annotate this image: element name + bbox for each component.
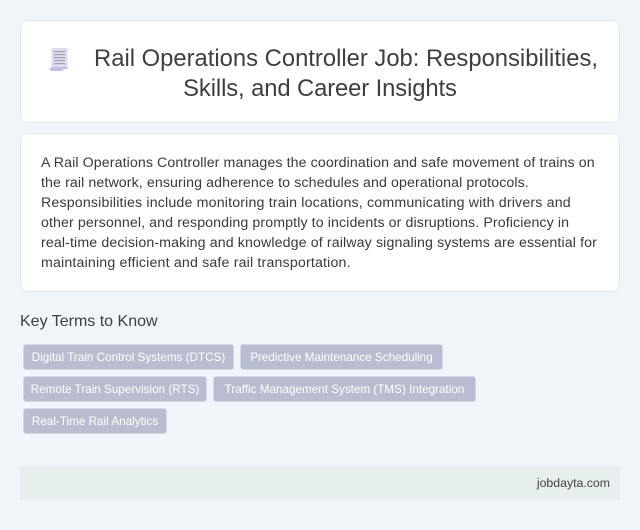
text block: description: Responsibilities include monitoring train locations, communicating with drivers and xyxy=(41,195,571,211)
tag: predictive maintenance: Predictive Maintenance Scheduling xyxy=(250,351,433,364)
title: Skills, and Career Insights xyxy=(183,75,457,102)
panel: title card xyxy=(20,20,620,123)
title xyxy=(94,45,598,102)
tag: TMS xyxy=(213,376,476,402)
text block: description: maintaining efficient and safe rail transportation. xyxy=(41,255,351,271)
text block: description xyxy=(41,155,597,271)
tag: predictive maintenance xyxy=(240,344,443,370)
panel: description card xyxy=(20,133,620,292)
tag: analytics xyxy=(23,408,167,434)
text block: description: real-time decision-making and knowledge of railway signaling systems are essential for xyxy=(41,235,597,251)
tag: TMS: Traffic Management System (TMS) Integration xyxy=(225,383,464,396)
tag: RTS xyxy=(23,376,207,402)
tag: DTCS xyxy=(23,344,234,370)
heading: key terms: Key Terms to Know xyxy=(20,313,158,330)
text block: description: A Rail Operations Controller manages the coordination and safe movement of trains on xyxy=(41,155,595,171)
tag: RTS: Remote Train Supervision (RTS) xyxy=(31,383,199,396)
text block: description: other personnel, and responding promptly to incidents or disruptions. Proficiency in xyxy=(41,215,569,231)
footer bar xyxy=(20,466,620,500)
tag: analytics: Real-Time Rail Analytics xyxy=(32,415,158,428)
icon: document scroll xyxy=(49,48,68,71)
text block: description: the rail network, ensuring adherence to schedules and operational protocols. xyxy=(41,175,529,191)
title: Rail Operations Controller Job: Responsibilities, xyxy=(94,45,598,72)
footer text: jobdayta.com xyxy=(537,476,610,490)
tag: DTCS: Digital Train Control Systems (DTCS) xyxy=(32,351,225,364)
